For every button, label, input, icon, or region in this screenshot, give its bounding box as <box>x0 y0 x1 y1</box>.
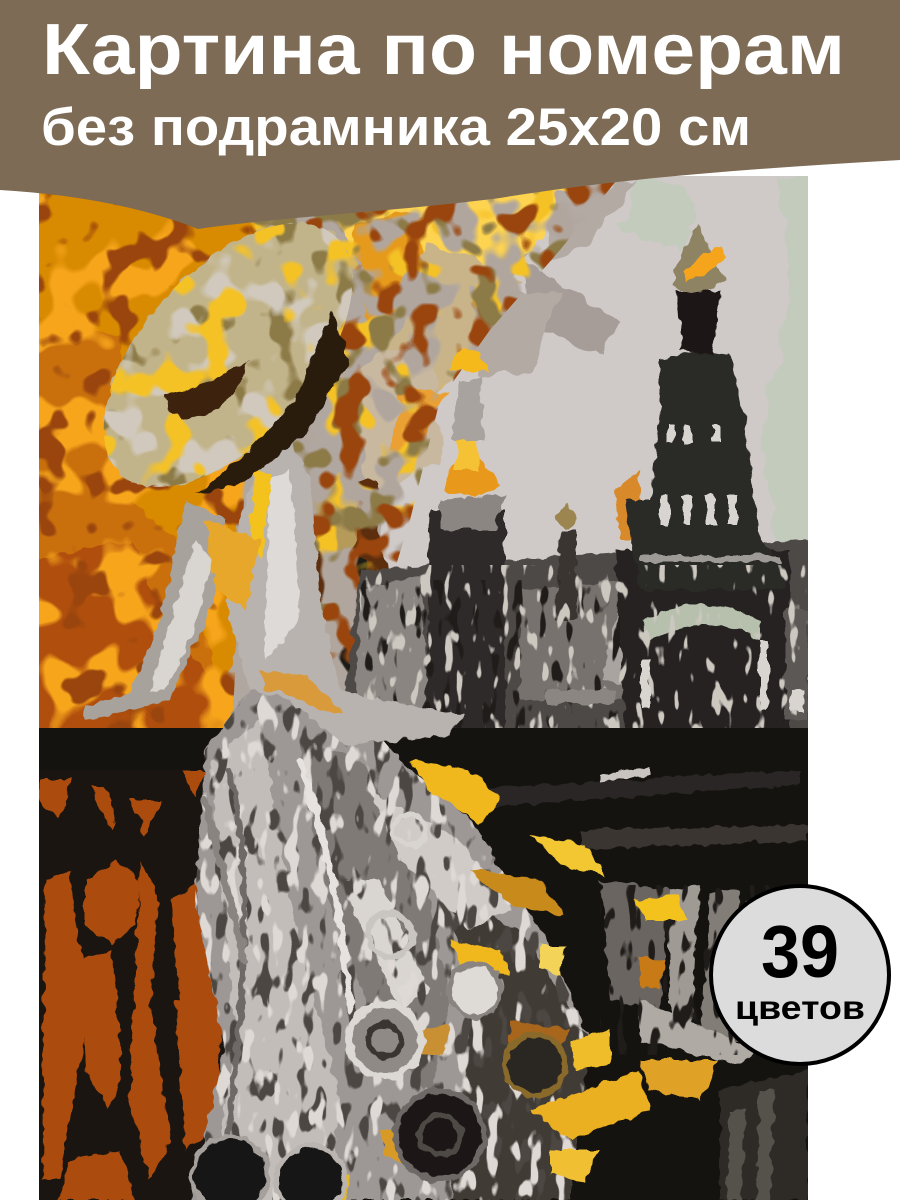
hat paint patches <box>104 223 352 487</box>
title: Картина по номерам <box>42 10 845 90</box>
skirt <box>190 660 590 1200</box>
orange railing ornaments <box>40 770 228 1200</box>
badge number: 39 <box>761 910 839 993</box>
roses <box>192 964 565 1200</box>
sky and sunset background <box>20 170 820 740</box>
mottling: yellow and grey clouds <box>250 182 615 691</box>
painting <box>20 170 820 1200</box>
mottling: lower rust sky <box>39 194 322 728</box>
hat <box>102 222 353 494</box>
building details <box>545 425 804 712</box>
skirt paint patches <box>190 660 590 1200</box>
mottling: orange sky <box>39 193 245 728</box>
badge label: цветов <box>735 989 865 1026</box>
balcony railing <box>39 728 808 1200</box>
badge: 39 colours <box>711 886 889 1064</box>
lower right columns <box>488 767 808 1200</box>
subtitle: без подрамника 25х20 см <box>41 98 751 157</box>
torso, arms and ribbon <box>82 440 465 745</box>
city skyline <box>340 224 810 740</box>
dress folds <box>205 760 426 1150</box>
woman in dress <box>58 179 590 1200</box>
yellow dabs on skirt <box>325 760 720 1200</box>
header banner <box>0 0 900 229</box>
